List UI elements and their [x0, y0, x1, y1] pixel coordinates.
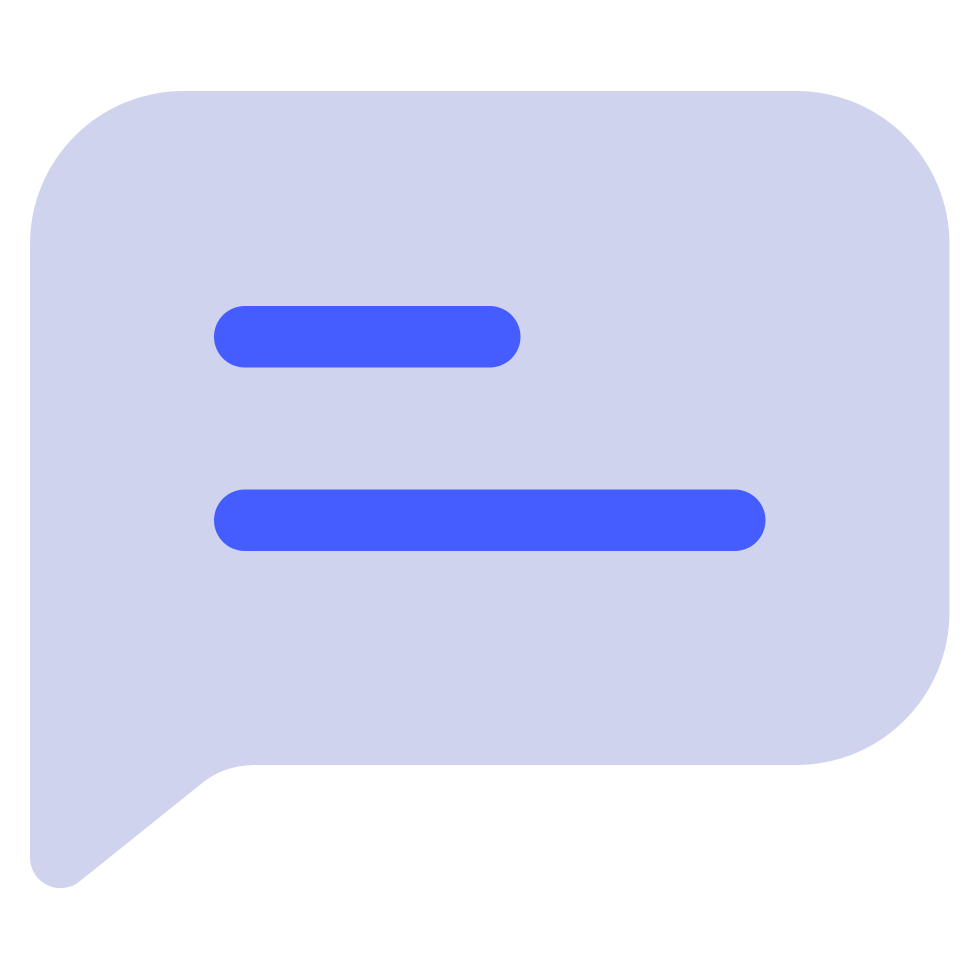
icon: chat bubble	[30, 91, 949, 888]
speech bubble body	[30, 91, 949, 888]
long text line	[214, 490, 766, 551]
short text line	[214, 306, 520, 368]
